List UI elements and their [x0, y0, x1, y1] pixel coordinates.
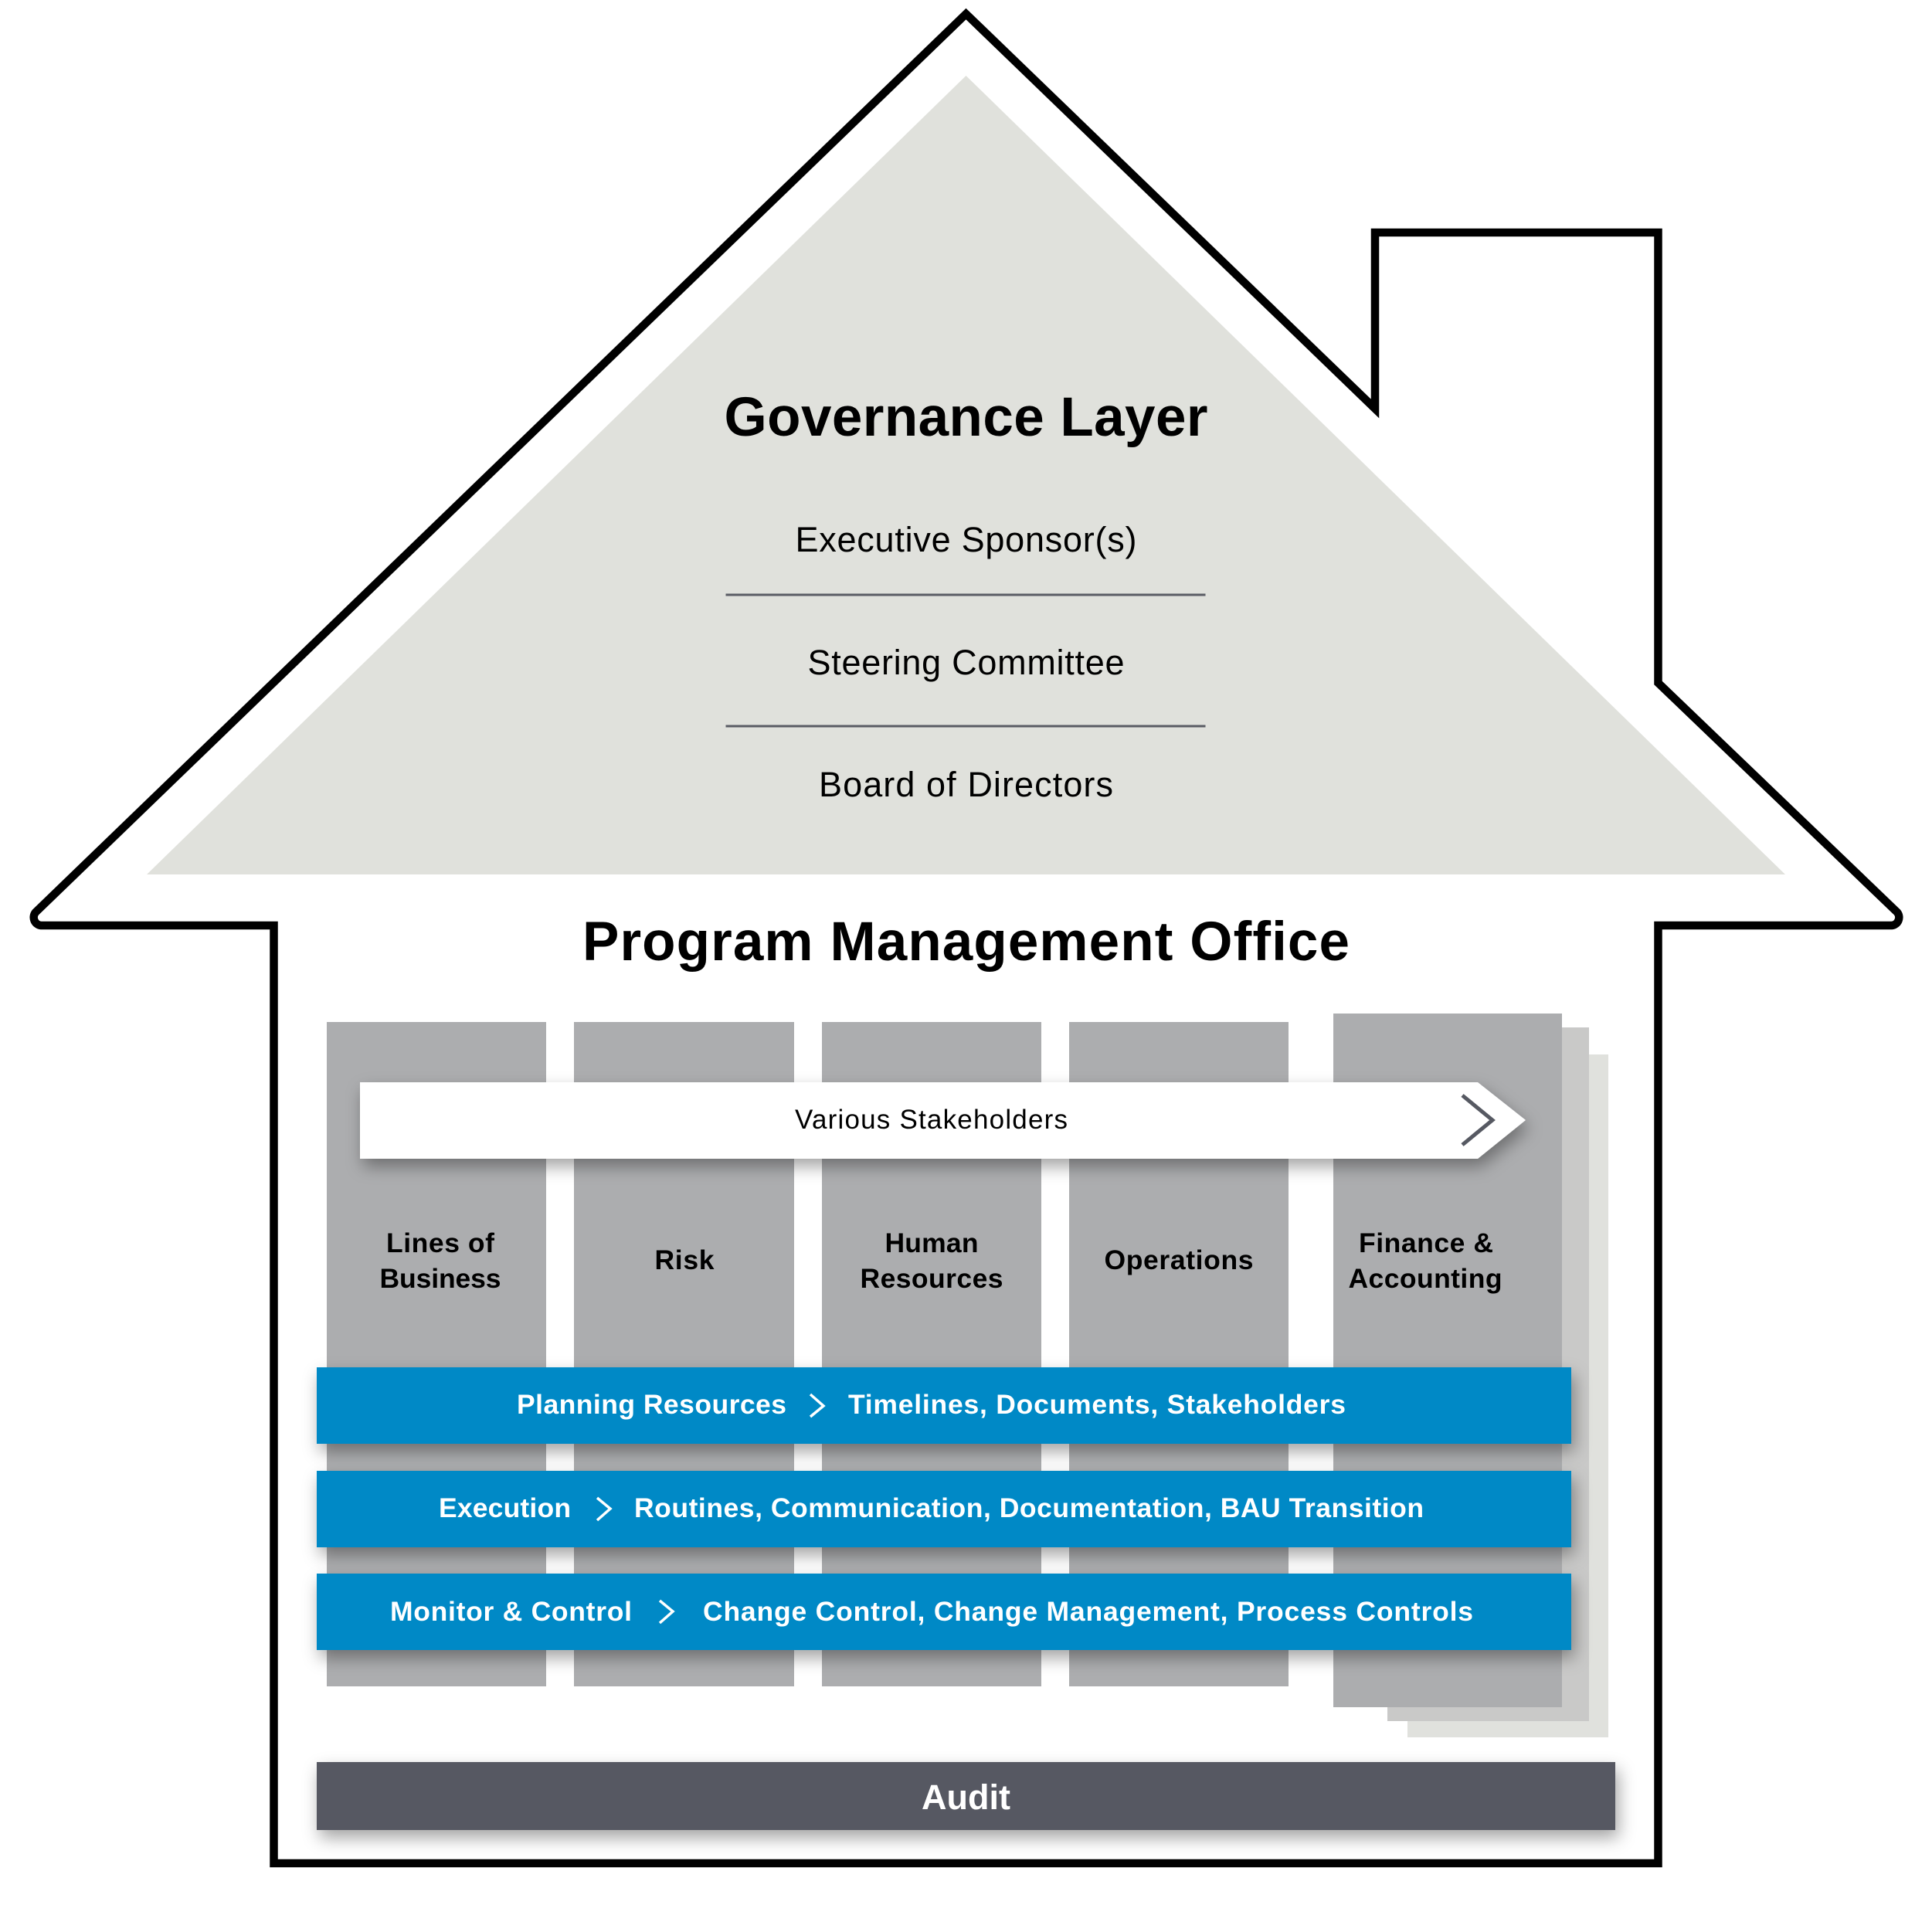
column: Risk	[574, 1022, 794, 1686]
bar: Planning Resources: Timelines, Documents, Stakeholders	[848, 1389, 1346, 1420]
arrow: Various Stakeholders: Various Stakeholders	[795, 1105, 1068, 1135]
bar: Planning Resources: Planning Resources	[517, 1389, 786, 1420]
column label: Human Resources: Human	[885, 1227, 978, 1258]
icon: chevron	[597, 1498, 610, 1520]
icon: chevron	[810, 1394, 823, 1417]
column: Operations	[1069, 1022, 1289, 1686]
bar: Planning Resources	[317, 1367, 1571, 1444]
column label: Lines of Business	[380, 1227, 501, 1294]
bar: Execution: Execution	[439, 1492, 571, 1523]
text: Board of Directors: Board of Directors	[819, 765, 1113, 804]
column label: Finance & Accounting: Accounting	[1349, 1263, 1502, 1294]
column label: Risk: Risk	[655, 1244, 715, 1275]
arrow: Various Stakeholders	[360, 1082, 1526, 1159]
column: Lines of Business	[327, 1022, 546, 1686]
bar: Audit: Audit	[922, 1778, 1010, 1817]
column label: Finance & Accounting: Finance &	[1359, 1227, 1493, 1258]
panel: governance layer	[147, 76, 1785, 874]
text: Executive Sponsor(s): Executive Sponsor(s)	[796, 520, 1137, 559]
governance triangle	[147, 76, 1785, 874]
panel: stacked back sheets	[1387, 1027, 1608, 1737]
heading: Governance Layer: Governance Layer	[725, 387, 1208, 448]
column label: Human Resources: Resources	[861, 1263, 1003, 1294]
bar: Monitor & Control: Change Control, Change Management, Process Controls	[703, 1596, 1473, 1627]
column label: Finance & Accounting	[1349, 1227, 1502, 1294]
bar: Execution: Routines, Communication, Documentation, BAU Transition	[634, 1492, 1424, 1523]
heading: Program Management Office: Program Management Office	[582, 912, 1350, 973]
icon: chevron	[660, 1601, 673, 1623]
bar: Audit	[317, 1762, 1615, 1830]
column: Human Resources	[822, 1022, 1041, 1686]
bar: Execution	[317, 1471, 1571, 1547]
column label: Lines of Business: Lines of	[386, 1227, 494, 1258]
bar: Monitor & Control: Monitor & Control	[390, 1596, 632, 1627]
text: Steering Committee: Steering Committee	[808, 643, 1125, 682]
bar: Monitor & Control	[317, 1574, 1571, 1650]
column label: Human Resources	[861, 1227, 1003, 1294]
column label: Lines of Business: Business	[380, 1263, 501, 1294]
column: Finance & Accounting	[1333, 1014, 1562, 1707]
column label: Operations: Operations	[1105, 1244, 1253, 1275]
icon: arrow chevron	[1462, 1095, 1492, 1145]
